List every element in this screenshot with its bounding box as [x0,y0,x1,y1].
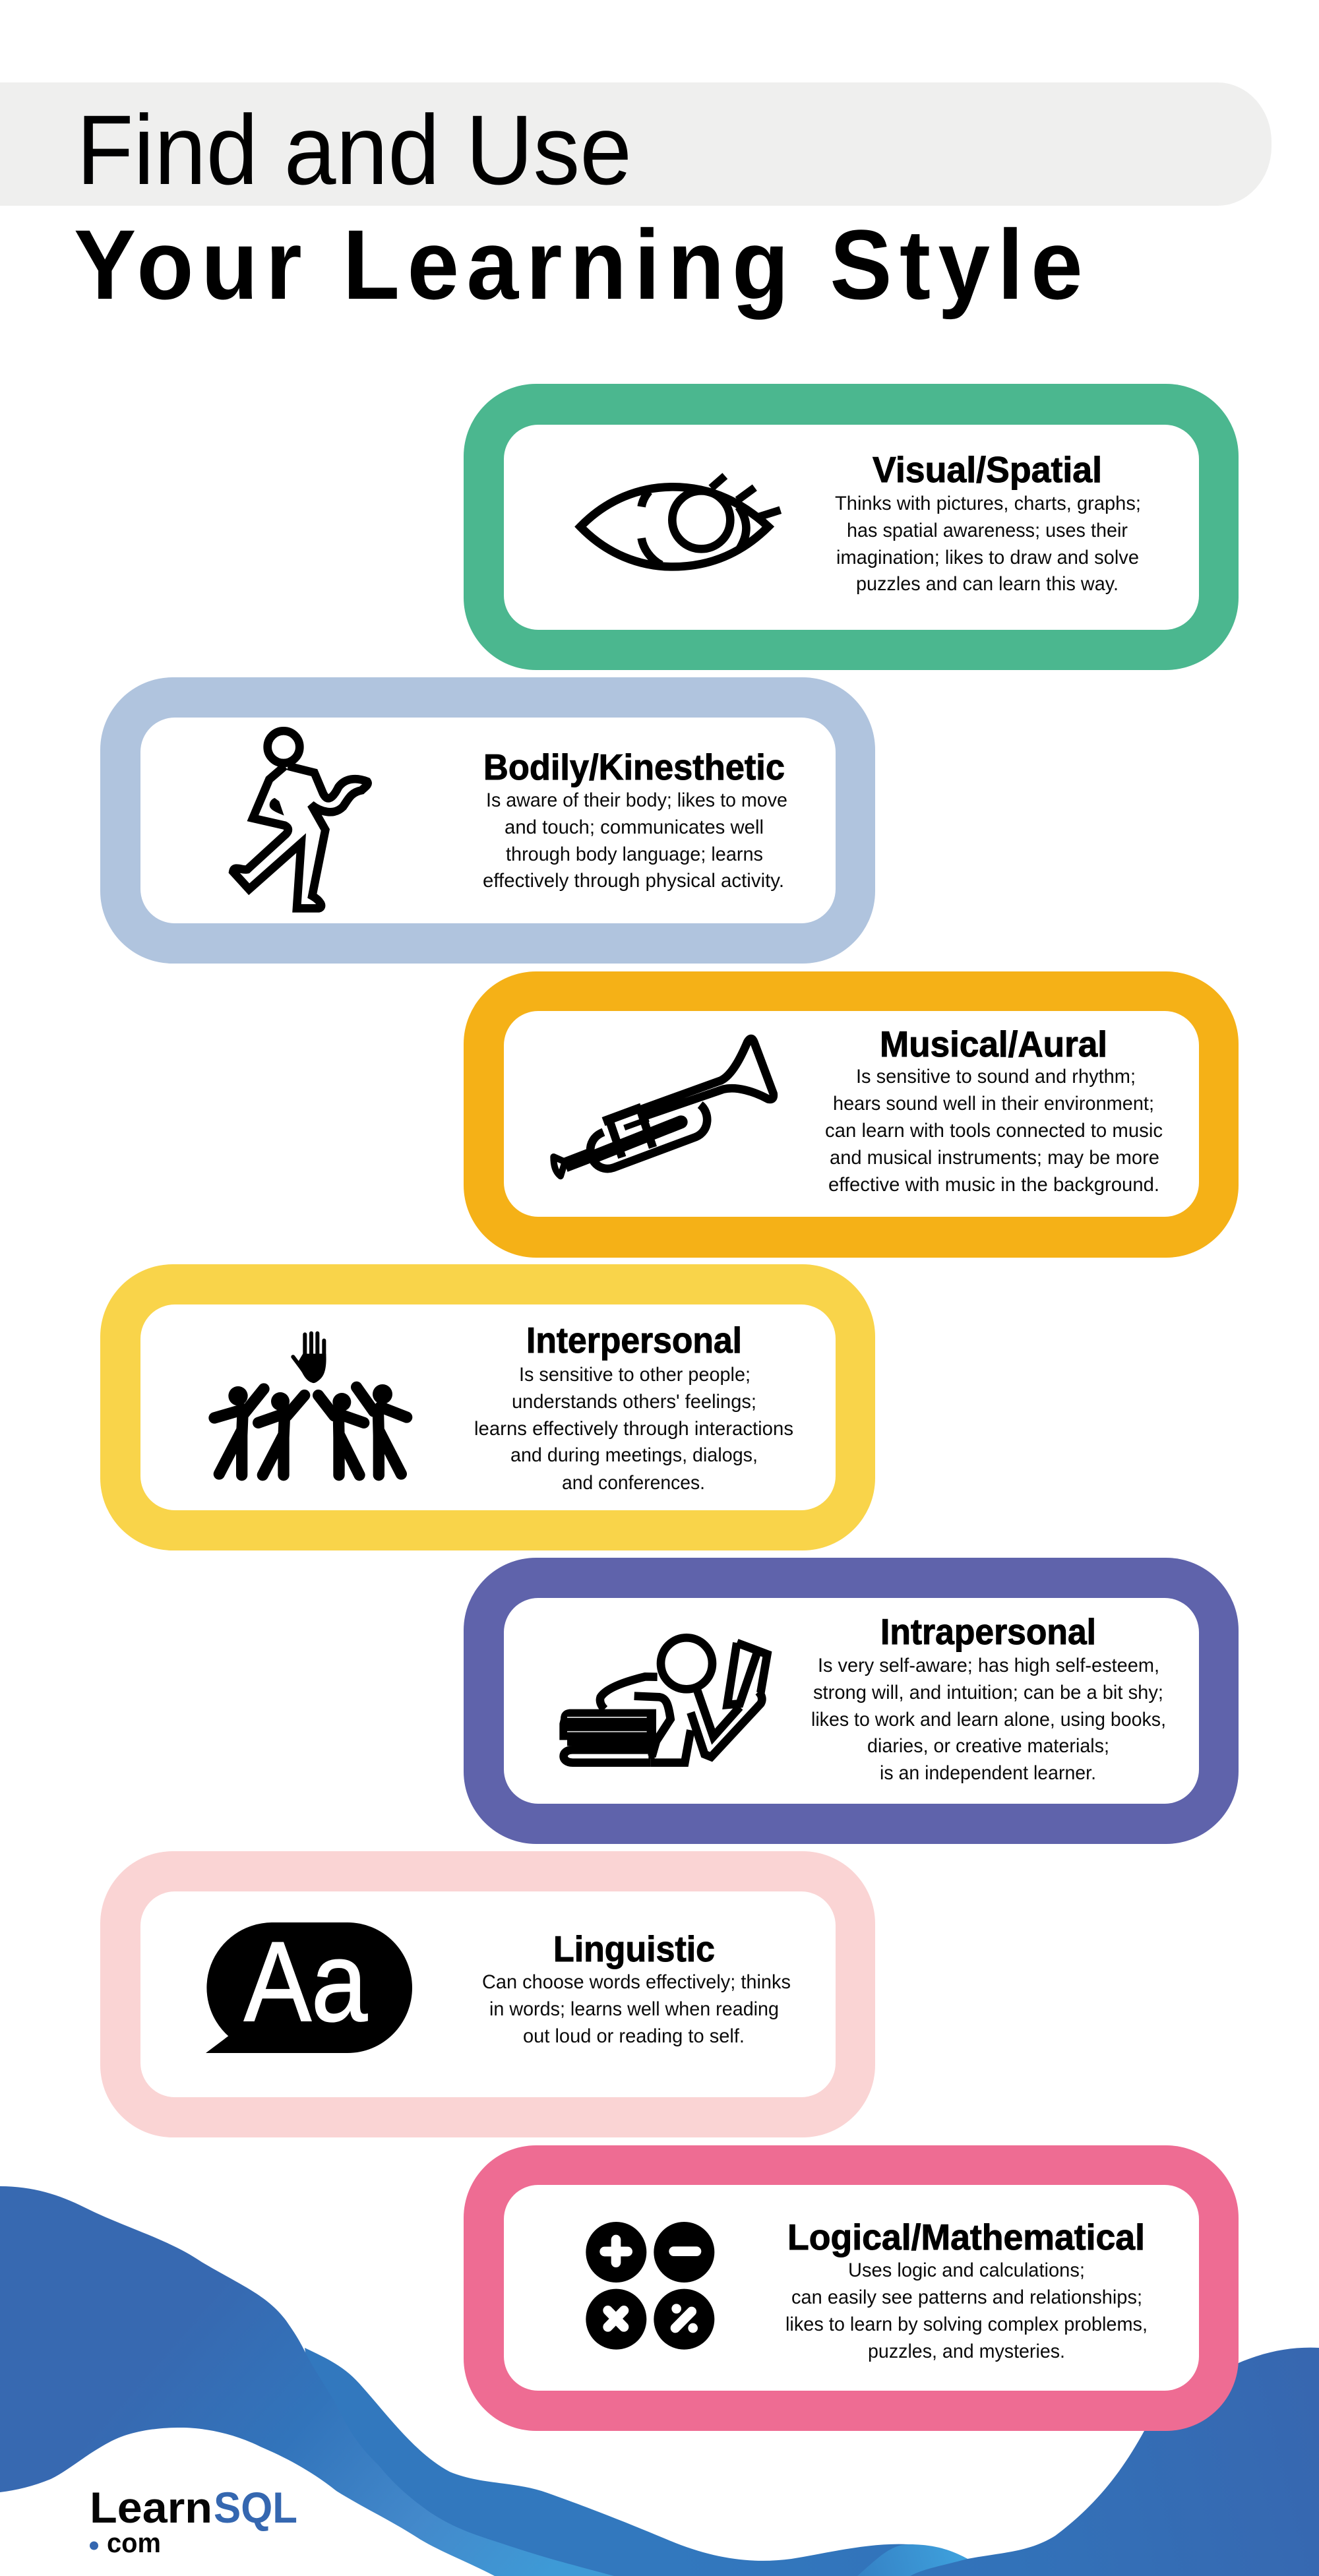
background waves [0,2186,1319,2576]
description: can learn with tools connected to music [825,1120,1163,1142]
description: effectively through physical activity. [483,870,784,892]
heading: Interpersonal [526,1320,742,1361]
icon: eye [580,476,780,567]
description: and conferences. [562,1472,705,1494]
heading: Intrapersonal [880,1611,1096,1652]
description [483,789,787,892]
logo: LearnSQL.com: Learn [90,2483,212,2532]
icon: speech bubble Aa: Aa [244,1918,367,2045]
description: and touch; communicates well [505,816,764,838]
description: Can choose words effectively; thinks [482,1971,791,1993]
panel: Logical/Mathematical [464,2145,1239,2431]
description: and musical instruments; may be more [830,1147,1159,1169]
description: puzzles and can learn this way. [856,573,1119,595]
heading: Logical/Mathematical [787,2217,1145,2257]
description: Thinks with pictures, charts, graphs; [835,493,1141,514]
panel: Linguistic [100,1851,875,2137]
description: through body language; learns [506,843,763,865]
heading: Musical/Aural [880,1024,1107,1064]
icon: people reaching to hand [214,1334,407,1475]
description: in words; learns well when reading [489,1998,779,2020]
description: has spatial awareness; uses their [847,520,1128,541]
icon: dancing figure [233,731,368,908]
description: learns effectively through interactions [474,1418,793,1440]
description [474,1364,793,1494]
panel: Interpersonal [100,1264,875,1550]
description: likes to work and learn alone, using books, [811,1709,1166,1731]
description: Is sensitive to other people; [519,1364,751,1386]
panel: Visual/Spatial [464,384,1239,670]
icon: person reading with books [559,1638,767,1763]
description: and during meetings, dialogs, [510,1444,758,1466]
description: strong will, and intuition; can be a bit shy; [813,1682,1163,1703]
description: effective with music in the background. [828,1174,1159,1196]
description: puzzles, and mysteries. [868,2341,1065,2362]
description: Uses logic and calculations; [848,2259,1085,2281]
description: hears sound well in their environment; [833,1093,1154,1115]
logo: LearnSQL.com: SQL [214,2483,297,2532]
panel: Musical/Aural [464,971,1239,1258]
description: Is sensitive to sound and rhythm; [856,1066,1136,1088]
title line 2: Your Learning Style [74,209,1090,320]
description: understands others' feelings; [512,1391,756,1413]
description: can easily see patterns and relationships; [791,2286,1142,2308]
heading: Linguistic [553,1928,715,1969]
description: Is very self-aware; has high self-esteem, [818,1655,1159,1676]
description: is an independent learner. [880,1762,1096,1784]
description: diaries, or creative materials; [867,1735,1109,1757]
description [785,2259,1148,2362]
title banner [0,82,1272,206]
logo: LearnSQL.com [90,2483,297,2558]
description: imagination; likes to draw and solve [836,547,1139,568]
description: out loud or reading to self. [523,2025,745,2047]
panel: Bodily/Kinesthetic [100,677,875,964]
description [482,1971,791,2047]
description [825,1066,1163,1196]
logo: LearnSQL.com: com [107,2527,161,2558]
description [811,1655,1166,1784]
heading: Visual/Spatial [873,449,1102,490]
icon: trumpet [553,1039,774,1176]
icon: speech bubble Aa [206,1918,412,2053]
description: likes to learn by solving complex problems, [785,2314,1148,2335]
description [835,493,1141,595]
heading: Bodily/Kinesthetic [483,747,785,787]
title line 1: Find and Use [77,94,632,205]
icon: math symbols [586,2222,714,2350]
description: Is aware of their body; likes to move [486,789,787,811]
panel: Intrapersonal [464,1558,1239,1844]
